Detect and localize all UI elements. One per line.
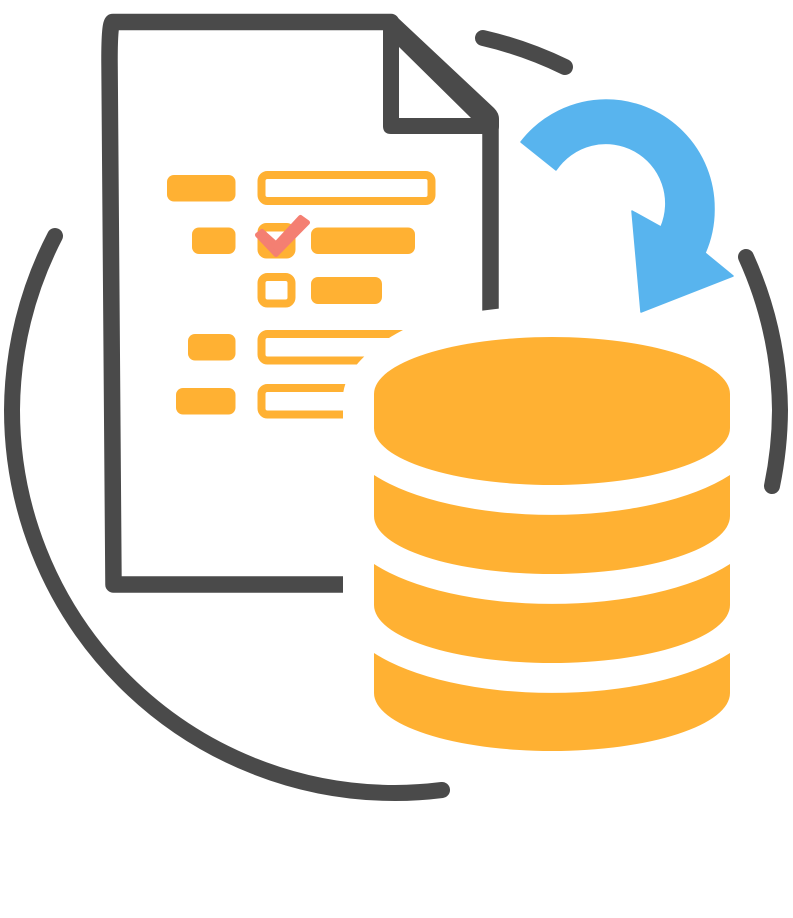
database top disk xyxy=(374,337,730,485)
row 1 input xyxy=(262,175,432,201)
circular frame arcs xyxy=(12,38,780,793)
database band 1 xyxy=(374,475,730,574)
empty checkbox xyxy=(262,277,292,304)
database xyxy=(374,337,730,751)
database band 3 xyxy=(374,653,730,751)
row 5 label xyxy=(176,388,236,414)
row 1 label xyxy=(167,175,236,202)
page fold xyxy=(383,14,499,134)
document outline xyxy=(110,14,499,584)
row 2 label xyxy=(192,228,236,254)
row 3 bar xyxy=(311,277,382,304)
row 4 input xyxy=(262,334,452,360)
curved blue arrow xyxy=(521,100,733,312)
checked checkbox xyxy=(258,218,308,258)
database band 2 xyxy=(374,564,730,663)
row 5 input xyxy=(262,388,452,414)
row 2 bar xyxy=(311,228,415,254)
row 4 label xyxy=(188,334,236,360)
form rows xyxy=(167,175,452,414)
white halo behind database xyxy=(343,308,760,610)
